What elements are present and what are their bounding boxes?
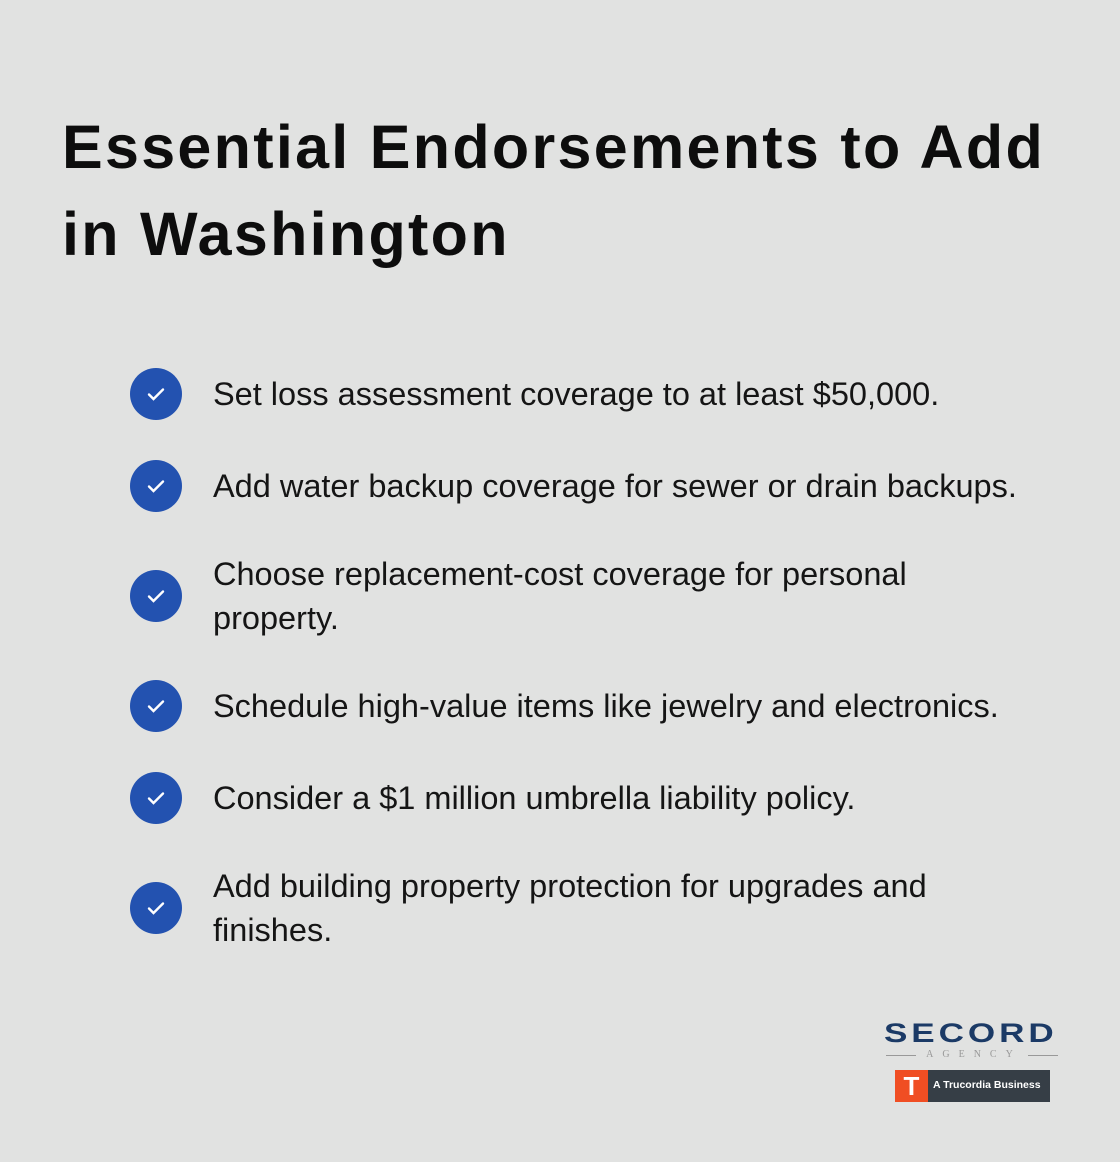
item 4: Schedule high-value items like jewelry and electronics. — [213, 688, 999, 724]
item 3: Choose replacement-cost coverage for personal property. — [213, 556, 907, 636]
logo — [884, 1018, 1058, 1102]
item 1: Set loss assessment coverage to at least $50,000. — [213, 376, 939, 412]
item 6: Add building property protection for upgrades and finishes. — [213, 868, 927, 948]
item 2: Add water backup coverage for sewer or drain backups. — [213, 468, 1017, 504]
logo: A Trucordia Business — [933, 1079, 1041, 1091]
logo: AGENCY — [926, 1049, 1022, 1060]
item 5: Consider a $1 million umbrella liability policy. — [213, 780, 855, 816]
logo: T — [904, 1071, 919, 1101]
item 1 — [130, 368, 939, 420]
logo: SECORD — [884, 1018, 1058, 1048]
title: Essential Endorsements to Add in Washington — [62, 113, 1045, 268]
item 2 — [130, 460, 1017, 512]
item 4 — [130, 680, 999, 732]
item 5 — [130, 772, 855, 824]
